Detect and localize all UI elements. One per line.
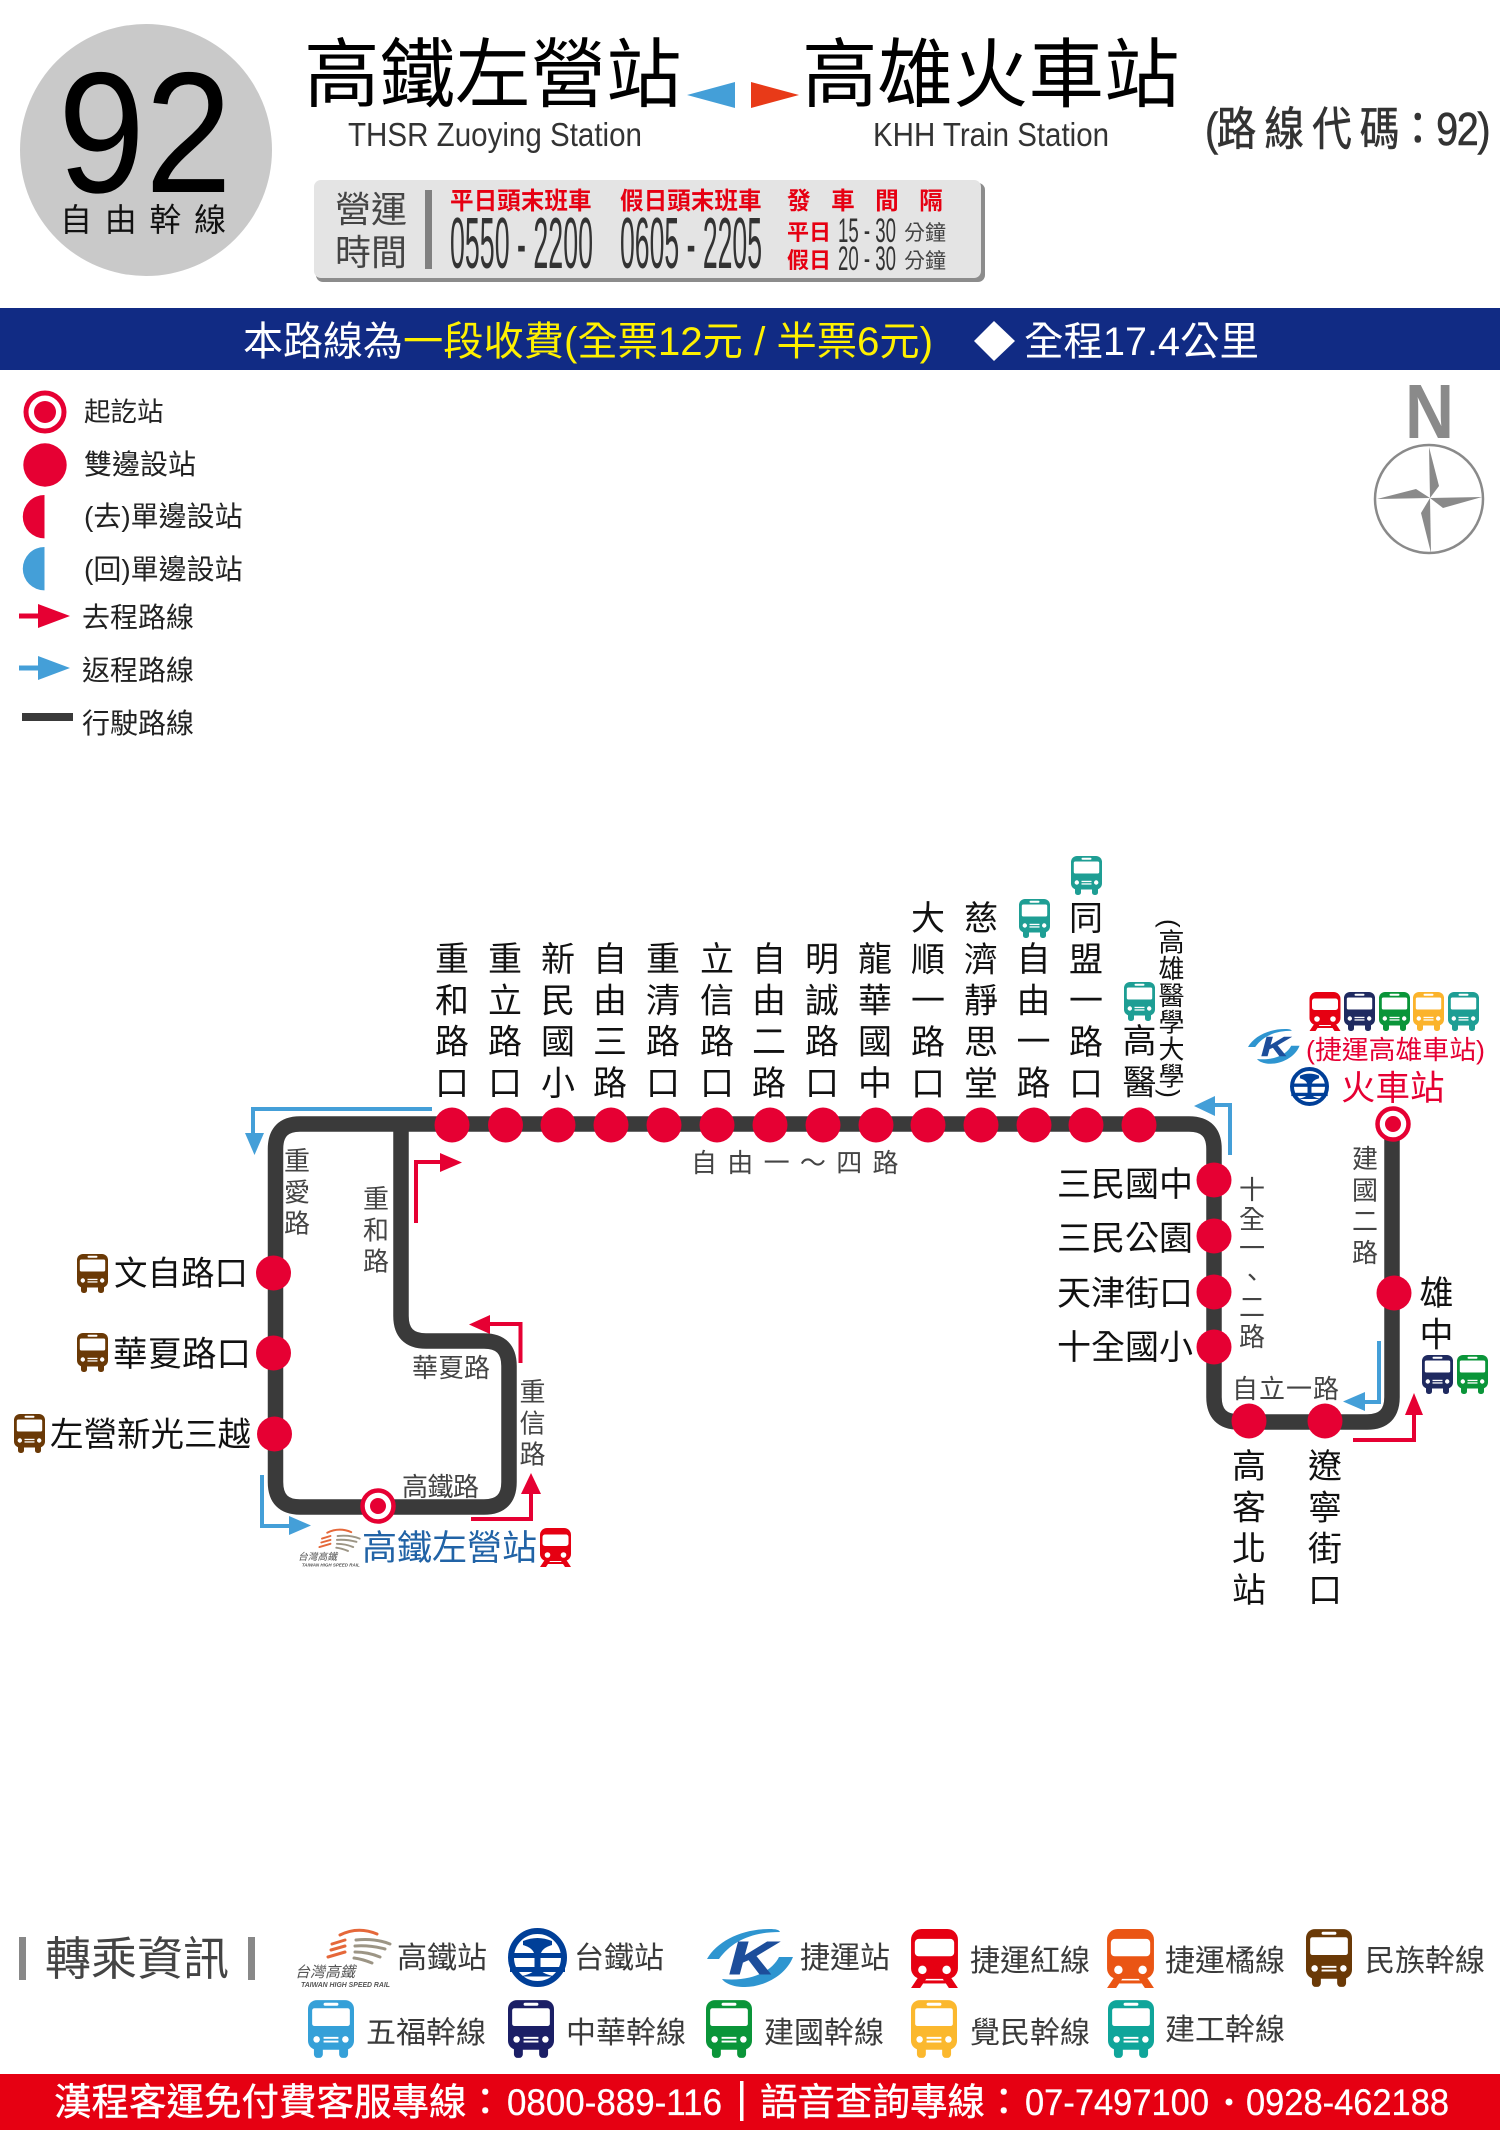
top row station names: 自由一路 [1011,941,1049,1107]
transfer legend: row 1: 台鐵站 [574,1942,664,1975]
top row station names: 慈濟靜思堂 [958,900,996,1107]
transfer legend: row 2: 建工幹線 [1165,2014,1285,2047]
legend: 去程路線 [82,602,194,633]
direction arrows [245,1096,1423,1535]
english station names [348,116,1109,153]
transfer legend: row 2 [308,2000,1285,2058]
operating hours panel: 0605 - 2205 [620,204,762,284]
transfer legend: row 1: 台灣高鐵 [295,1964,357,1981]
route number badge [20,24,272,276]
left stations with brown bus icons: 左營新光三越 [50,1417,251,1454]
road names: 自立一路 [1232,1374,1339,1404]
customer service footer: 漢程客運免付費客服專線： [54,2081,504,2123]
right stations: 三民公園 [1057,1220,1193,1258]
top row station names: 新民國小 [536,941,574,1107]
Kaohsiung station transfer cluster: K [1261,1031,1292,1062]
customer service footer: 0928-462188 [1246,2081,1449,2123]
road names: 重信路 [516,1378,546,1472]
transfer legend: row 2: 中華幹線 [566,2017,686,2050]
route code: (路 線 代 碼：92) [1205,104,1491,156]
terminal: THSR Zuoying [362,1490,394,1522]
operating hours panel: 發車間隔 [787,188,963,215]
station dots: left and right [256,1162,1412,1452]
operating hours panel: 15 - 30 [838,212,896,250]
teal bus icons on top row [1019,856,1155,1021]
english station names: THSR Zuoying Station [348,116,642,153]
transfer legend: row 1: 高鐵站 [397,1942,487,1975]
route line [276,1124,1392,1507]
road names: 高鐵路 [402,1472,479,1502]
right stations: 三民國中 [1057,1166,1193,1204]
title: route terminals [304,33,1180,117]
customer service footer: 0800-889-116 [507,2081,722,2123]
top row station names: 自由二路 [746,941,784,1107]
title: route terminals: 高雄火車站 [802,33,1180,117]
legend: 返程路線 [82,655,194,686]
english station names: KHH Train Station [873,116,1109,153]
operating hours panel: 分鐘 [904,250,946,273]
title: route terminals: 高鐵左營站 [304,33,682,117]
operating hours panel: 營運 [335,189,407,230]
road names: 建國二路 [1348,1145,1378,1271]
operating hours panel: 平日頭末班車 [450,188,592,215]
operating hours panel: 分鐘 [904,222,946,245]
station dots: top row [434,1108,1156,1142]
operating hours panel: 平日 [787,220,831,245]
operating hours panel: 20 - 30 [838,240,896,278]
top row station names: 明誠路口 [800,941,838,1107]
road names [280,1145,1378,1502]
top row station names: 高醫 [1117,1023,1155,1106]
station: Xiongzhong with bus icons [1414,1275,1488,1394]
Kaohsiung station transfer cluster: (捷運高雄車站) [1306,1035,1485,1065]
bottom stations: 遼寧街口 [1302,1448,1342,1614]
transfer legend: row 1: 捷運紅線 [970,1945,1090,1978]
route number badge: 自由幹線 [60,202,239,238]
legend: (回)單邊設站 [84,554,243,585]
legend: 雙邊設站 [84,449,196,480]
transfer legend: row 1: TAIWAN HIGH SPEED RAIL [301,1982,390,1989]
compass: N [1405,369,1454,455]
road names: 華夏路 [412,1353,490,1383]
compass [1375,369,1483,553]
top row station names: 立信路口 [694,941,732,1107]
bottom stations [1226,1448,1342,1614]
top row station names: 重清路口 [640,941,678,1107]
top row station names [430,900,1185,1107]
top row station names: 重和路口 [430,941,468,1107]
transfer legend: row 1 [295,1929,1485,1989]
legend: 行駛路線 [82,708,194,739]
legend [19,393,243,739]
road names: 重愛路 [280,1147,310,1241]
station: Xiongzhong with bus icons: 雄中 [1414,1275,1453,1358]
bottom stations: 高客北站 [1226,1448,1264,1614]
route number badge: 92 [58,37,232,229]
road names: 十全一、二路 [1236,1176,1266,1352]
THSR Zuoying station label: TAIWAN HIGH SPEED RAIL [302,1563,360,1568]
transfer info heading: 轉乘資訊 [45,1933,229,1985]
THSR Zuoying station label [298,1528,571,1568]
customer service footer: 語音查詢專線： [760,2081,1022,2123]
terminal: Kaohsiung station [1378,1108,1408,1140]
operating hours panel: 時間 [335,232,407,273]
transfer legend: row 1: 捷運橘線 [1165,1945,1285,1978]
Kaohsiung station transfer cluster: 火車站 [1341,1070,1444,1108]
transfer legend: row 2: 覺民幹線 [970,2017,1090,2050]
left stations with brown bus icons [14,1254,251,1454]
top row station names: 自由三路 [588,941,626,1107]
operating hours panel: 0550 - 2200 [450,204,593,284]
top row station names: 重立路口 [482,941,520,1107]
transfer legend: row 2: 五福幹線 [366,2017,486,2050]
customer service footer: 07-7497100 [1025,2081,1209,2123]
right stations: 十全國小 [1057,1329,1193,1367]
transfer legend: row 1: K [729,1932,779,1984]
legend: (去)單邊設站 [84,501,243,532]
operating hours panel: 假日頭末班車 [620,188,762,215]
transfer legend: row 2: 建國幹線 [764,2017,884,2050]
legend: 起訖站 [84,397,164,427]
left stations with brown bus icons: 華夏路口 [113,1336,251,1374]
top row station names: 龍華國中 [852,941,890,1107]
right stations: 天津街口 [1057,1275,1193,1313]
fare banner: 全程17.4公里 [1024,320,1259,364]
fare banner: 一段收費(全票12元 / 半票6元) [403,320,933,364]
top row station names: 同盟一路口 [1064,900,1102,1107]
top row station names: (高雄醫學大學) [1155,919,1185,1099]
Kaohsiung station transfer cluster [1248,992,1485,1108]
operating hours panel: 假日 [787,248,831,273]
road names: 重和路 [360,1185,390,1279]
fare banner: 本路線為 [243,320,403,364]
operating hours panel [314,180,985,284]
top row station names: 大順一路口 [906,900,944,1107]
transfer legend: row 1: 捷運站 [800,1942,890,1975]
THSR Zuoying station label: 高鐵左營站 [362,1529,537,1568]
THSR Zuoying station label: 台灣高鐵 [298,1551,338,1563]
right stations [1057,1166,1193,1367]
road names: 自由一～四路 [691,1148,909,1178]
customer service footer [0,2074,1500,2130]
transfer legend: row 1: 民族幹線 [1365,1945,1485,1978]
left stations with brown bus icons: 文自路口 [114,1256,248,1293]
fare banner [0,308,1500,370]
